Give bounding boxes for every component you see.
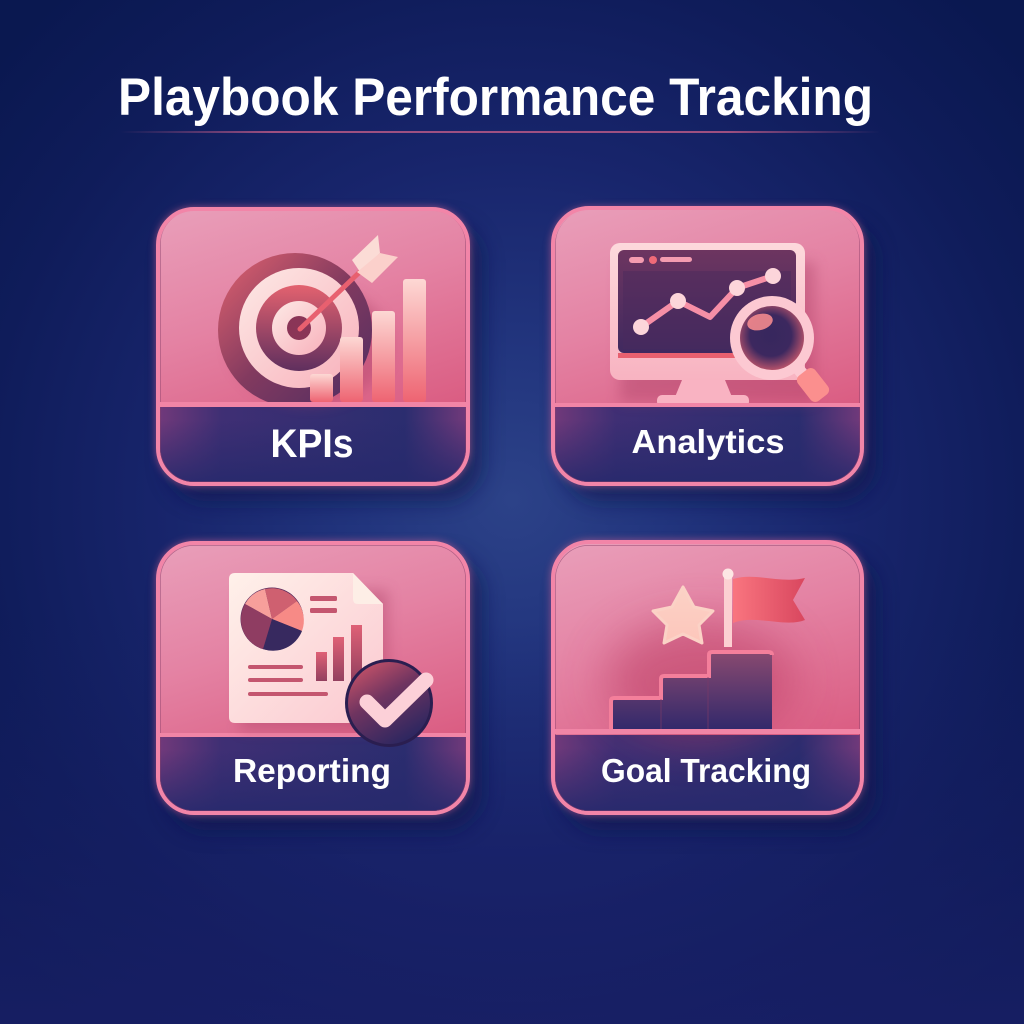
label: Analytics: Analytics: [632, 423, 784, 460]
panel: Goal Tracking: [551, 540, 876, 830]
icon: report document: [229, 573, 388, 730]
label: Reporting: Reporting: [233, 752, 391, 789]
panel: Reporting: [156, 541, 482, 830]
panel: Analytics: [551, 207, 876, 501]
label: Goal Tracking: Goal Tracking: [601, 752, 811, 789]
icon: check badge: [345, 659, 433, 747]
icon: flag: [722, 568, 805, 647]
bar chart icon: [310, 279, 426, 402]
pie chart: [240, 588, 304, 651]
label: KPIs: KPIs: [270, 422, 354, 466]
panel: KPIs: [156, 207, 482, 501]
icon: star: [653, 587, 713, 643]
title: Playbook Performance Tracking: [118, 68, 873, 127]
icon: magnifying glass: [730, 296, 832, 404]
icon: staircase: [610, 651, 772, 729]
icon: monitor with line chart: [610, 243, 815, 407]
icon: target with arrow: [218, 235, 398, 407]
